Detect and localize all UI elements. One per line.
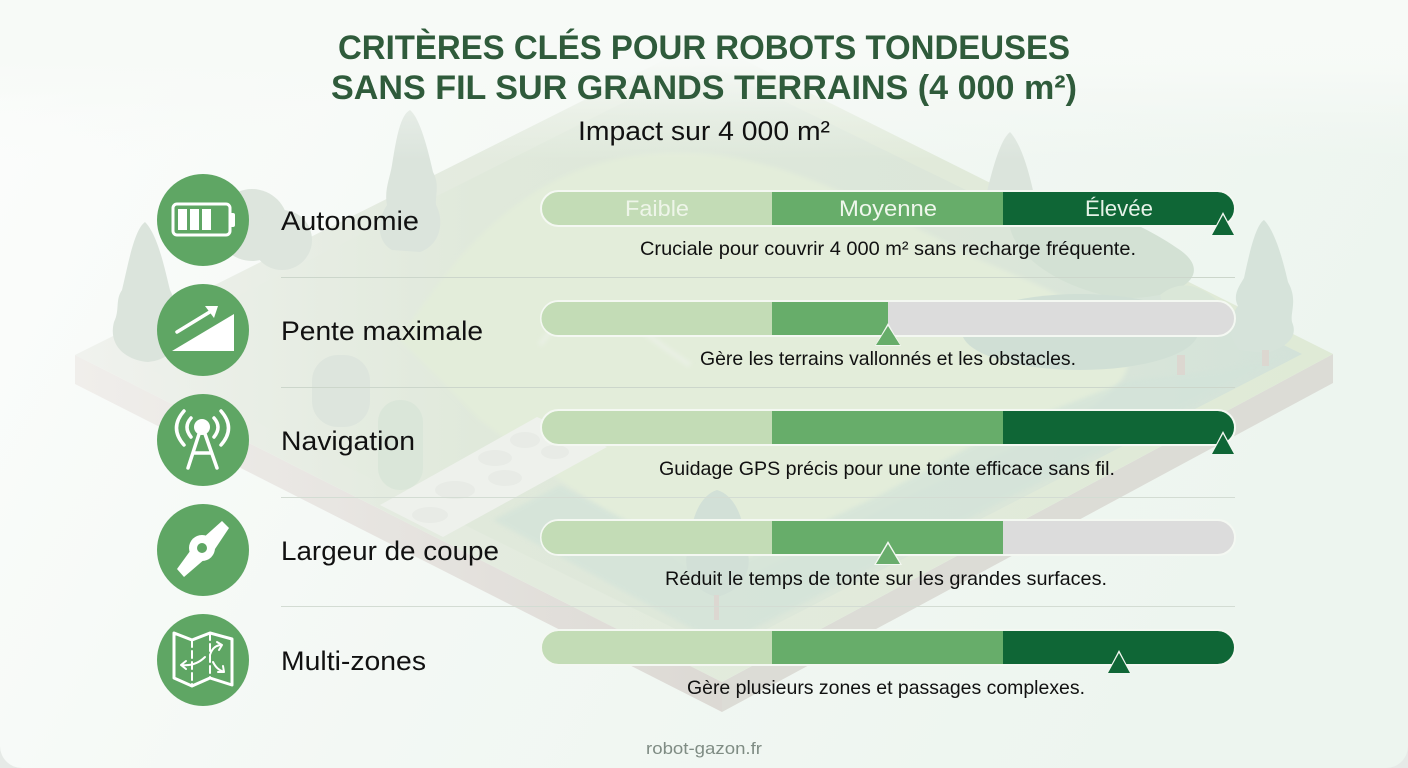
impact bar: Faible: [625, 196, 689, 221]
description: Réduit le temps de tonte sur les grandes surfaces.: [665, 568, 1107, 590]
impact bar: [541, 520, 1235, 555]
marker: [1211, 431, 1235, 454]
description: Gère plusieurs zones et passages complexes.: [687, 677, 1085, 699]
label: Largeur de coupe: [281, 536, 499, 566]
marker: [1107, 650, 1131, 673]
row: Navigation: [157, 394, 1235, 486]
icon: battery: [157, 174, 249, 266]
impact bar: [541, 410, 1235, 445]
description: Guidage GPS précis pour une tonte efficace sans fil.: [659, 458, 1115, 480]
label: Multi-zones: [281, 646, 426, 676]
icon: blade: [157, 504, 249, 596]
label: Pente maximale: [281, 316, 483, 346]
row: Pente maximale: [157, 284, 1235, 376]
row: Autonomie: [157, 174, 1235, 266]
icon: antenna: [157, 394, 249, 486]
label: Navigation: [281, 426, 415, 456]
footer: source: robot-gazon.fr: [646, 739, 762, 758]
row: Largeur de coupe: [157, 504, 1235, 596]
impact bar: [541, 630, 1235, 665]
marker: [874, 541, 902, 565]
title: CRITÈRES CLÉS POUR ROBOTS TONDEUSES: [338, 29, 1070, 67]
impact bar: [541, 301, 1235, 336]
description: Gère les terrains vallonnés et les obstacles.: [700, 348, 1076, 370]
icon: slope: [157, 284, 249, 376]
title: SANS FIL SUR GRANDS TERRAINS (4 000 m²): [331, 69, 1077, 107]
marker: [875, 323, 901, 346]
row: Multi-zones: [157, 614, 1235, 706]
round trees: [216, 189, 1225, 490]
impact bar: [541, 191, 1235, 226]
title: [331, 29, 1077, 107]
paving strip: [380, 417, 607, 537]
icon: map: [157, 614, 249, 706]
impact bar: Moyenne: [839, 196, 937, 221]
impact bar: Élevée: [1085, 196, 1153, 221]
description: Cruciale pour couvrir 4 000 m² sans recharge fréquente.: [640, 238, 1136, 260]
label: Autonomie: [281, 206, 419, 236]
subtitle: Impact sur 4 000 m²: [578, 116, 830, 146]
conifer trees: [113, 110, 1294, 620]
marker: [1211, 212, 1235, 235]
